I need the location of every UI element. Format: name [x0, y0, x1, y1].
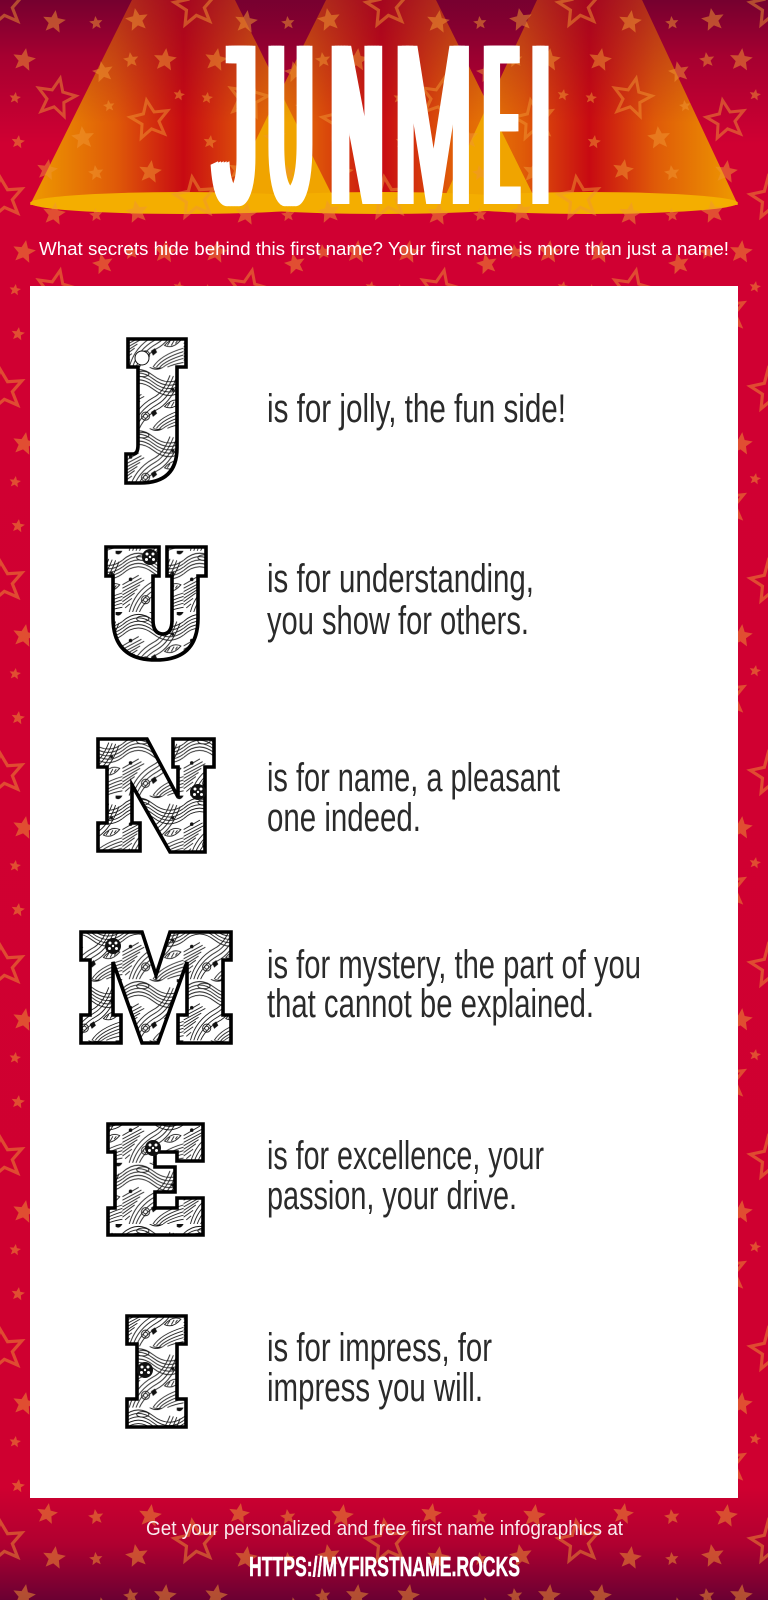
- letter M row: [81, 932, 641, 1043]
- letter J row: [126, 339, 566, 483]
- title: U: [269, 0, 312, 253]
- letter E row: [108, 1124, 544, 1235]
- title: J: [215, 0, 256, 253]
- letter J: [126, 339, 186, 483]
- letter N: [98, 739, 214, 852]
- letter N row: [98, 739, 560, 852]
- spotlight top shading: [30, 0, 738, 205]
- text E: is for excellence, your: [267, 1134, 544, 1178]
- letter U: [106, 547, 206, 660]
- letter M row: that cannot be explained.: [267, 982, 594, 1026]
- spotlight: right: [441, 0, 738, 205]
- letter M: [81, 932, 231, 1043]
- footer prompt: Get your personalized and free first name infographics at: [146, 1518, 623, 1540]
- text U: is for understanding,: [267, 557, 534, 601]
- title: M: [394, 0, 473, 253]
- text J: is for jolly, the fun side!: [267, 387, 566, 431]
- letter I row: impress you will.: [267, 1366, 483, 1410]
- text I: is for impress, for: [267, 1326, 492, 1370]
- letter N row: one indeed.: [267, 796, 421, 840]
- panel: white card: [30, 286, 738, 1498]
- stage spotlights: [30, 0, 738, 214]
- footer url: HTTPS://MYFIRSTNAME.ROCKS: [249, 1551, 520, 1582]
- spotlight overlap: left: [224, 91, 337, 205]
- title: [210, 0, 553, 253]
- spotlight overlap: right: [441, 104, 538, 205]
- subtitle: What secrets hide behind this first name? Your first name is more than just a name!: [39, 239, 729, 259]
- spotlight: left: [30, 0, 337, 205]
- spotlight floor ellipses: [30, 192, 738, 214]
- letter E: [108, 1124, 203, 1235]
- text N: is for name, a pleasant: [267, 756, 560, 800]
- letter U row: [106, 547, 534, 660]
- letter U row: you show for others.: [267, 599, 529, 643]
- letter I row: [127, 1316, 492, 1427]
- text M: is for mystery, the part of you: [267, 943, 641, 987]
- title: E: [486, 0, 517, 253]
- title: I: [528, 0, 553, 253]
- title: N: [332, 0, 382, 253]
- letter I: [127, 1316, 186, 1427]
- letter E row: passion, your drive.: [267, 1174, 517, 1218]
- spotlight: centre: [224, 0, 538, 205]
